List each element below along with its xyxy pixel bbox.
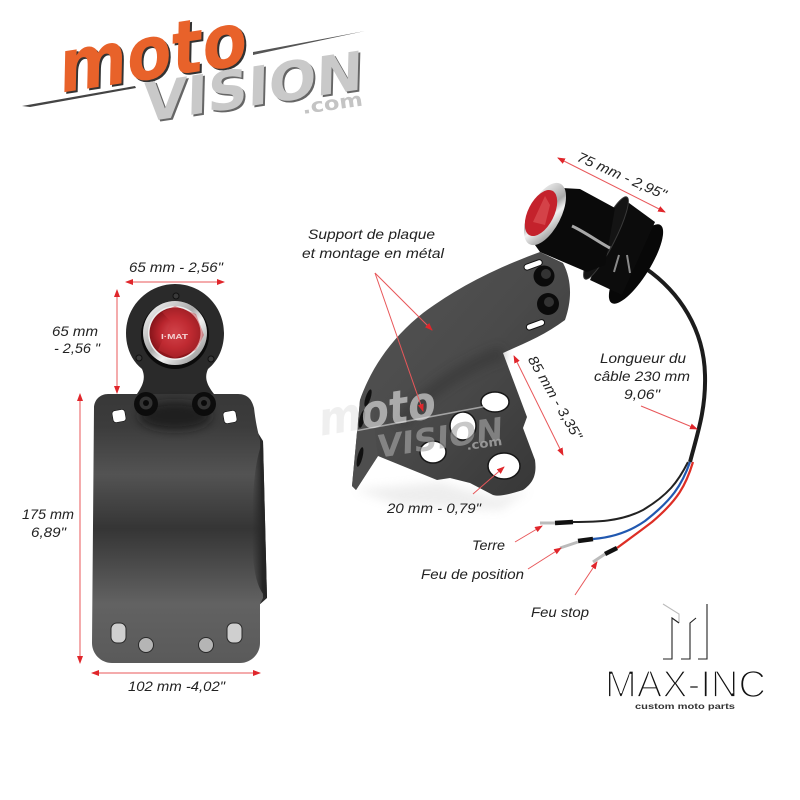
label: metal support	[302, 226, 445, 261]
disc screws	[136, 293, 214, 362]
red dimension arrows	[80, 158, 697, 673]
label: lamp height	[52, 323, 101, 356]
label: lamp height: 65 mm	[52, 323, 98, 339]
bracket fold	[352, 368, 378, 490]
label: lamp depth: 75 mm - 2,95"	[575, 149, 670, 203]
watermark vision: VISION	[377, 411, 503, 466]
max-inc tagline: custom moto parts	[635, 701, 735, 711]
plate right flap	[250, 420, 267, 606]
label: cable length: 9,06"	[624, 386, 661, 402]
mounting bolts	[134, 392, 216, 416]
lamp body	[535, 188, 615, 272]
label: metal support: et montage en métal	[302, 245, 445, 261]
top square holes	[112, 409, 237, 424]
rear flange	[600, 218, 672, 310]
watermark: motovision on bracket	[302, 374, 503, 466]
arrows: metal support pointers	[375, 273, 432, 411]
arrow: lamp height	[116, 290, 118, 393]
upper slots	[523, 259, 545, 331]
bracket bolts	[534, 266, 559, 315]
bottom slots and holes	[111, 623, 242, 652]
ground shadow	[355, 482, 530, 510]
dimension labels	[22, 149, 690, 694]
rear housing highlights	[614, 255, 630, 273]
arrow: cable length	[641, 406, 697, 429]
body highlight	[572, 226, 610, 248]
cable	[645, 268, 705, 462]
label: plate width: 102 mm -4,02"	[128, 678, 226, 694]
plate body	[92, 394, 263, 663]
watermark swoosh	[302, 403, 503, 441]
max-inc wordmark: MAX-INC	[605, 664, 766, 706]
fold slots	[355, 389, 373, 467]
arrow: position light wire	[528, 548, 561, 569]
label: plate height: 175 mm	[22, 506, 74, 522]
product: front view of plate: I·MAT	[161, 334, 189, 341]
side red lens	[518, 185, 564, 241]
product: side view of bracket, lamp and wires	[352, 176, 705, 562]
chrome ring	[141, 301, 209, 369]
side chrome rim	[515, 176, 575, 252]
arrow: lamp depth	[558, 158, 665, 212]
wire: blue	[560, 462, 690, 548]
logo word: vision shadow: VISION	[145, 41, 366, 137]
logo word: vision: VISION	[143, 39, 364, 135]
max-inc icon	[663, 604, 707, 659]
bracket plate	[352, 252, 570, 496]
arrow: brake light wire	[575, 562, 597, 595]
label: metal support: Support de plaque	[308, 226, 435, 242]
label: hole diameter: 20 mm - 0,79"	[386, 500, 482, 516]
plate curved dark band	[252, 441, 267, 598]
wire: black	[540, 462, 688, 523]
lamp mounting disc	[126, 284, 224, 394]
label: ground: Terre	[472, 537, 505, 553]
label: cable length: câble 230 mm	[594, 368, 690, 384]
watermark moto: moto	[319, 374, 436, 447]
arrow: lamp width	[126, 281, 224, 283]
arrow: hole diameter	[473, 467, 504, 494]
label: lamp height: - 2,56 "	[54, 340, 101, 356]
label: cable length: Longueur du	[600, 350, 686, 366]
label: brake light: Feu stop	[531, 604, 589, 620]
front flange	[577, 193, 635, 283]
wire: red	[593, 462, 693, 562]
logo suffix: .com: .com	[301, 89, 364, 119]
label: lamp width: 65 mm - 2,56"	[129, 259, 224, 275]
arrow: bracket length	[514, 356, 563, 455]
watermark com: .com	[465, 434, 503, 453]
logo: motovision	[22, 0, 366, 137]
fold shade	[400, 353, 503, 425]
rear housing	[590, 200, 655, 295]
bracket large holes	[420, 392, 520, 479]
red lens	[150, 308, 200, 358]
logo: max-inc	[605, 604, 766, 711]
arrow: ground wire	[515, 526, 542, 542]
arrow: plate width	[92, 672, 260, 674]
label: bracket length: 85 mm - 3,35"	[525, 353, 586, 443]
label: plate height	[22, 506, 74, 540]
arrow: plate height	[79, 394, 81, 663]
logo swoosh	[22, 31, 365, 107]
plate shading under bolts	[139, 402, 211, 430]
label: cable length	[594, 350, 690, 402]
label: position light: Feu de position	[421, 566, 524, 582]
product: front view of plate	[92, 284, 267, 663]
label: plate height: 6,89"	[31, 524, 67, 540]
